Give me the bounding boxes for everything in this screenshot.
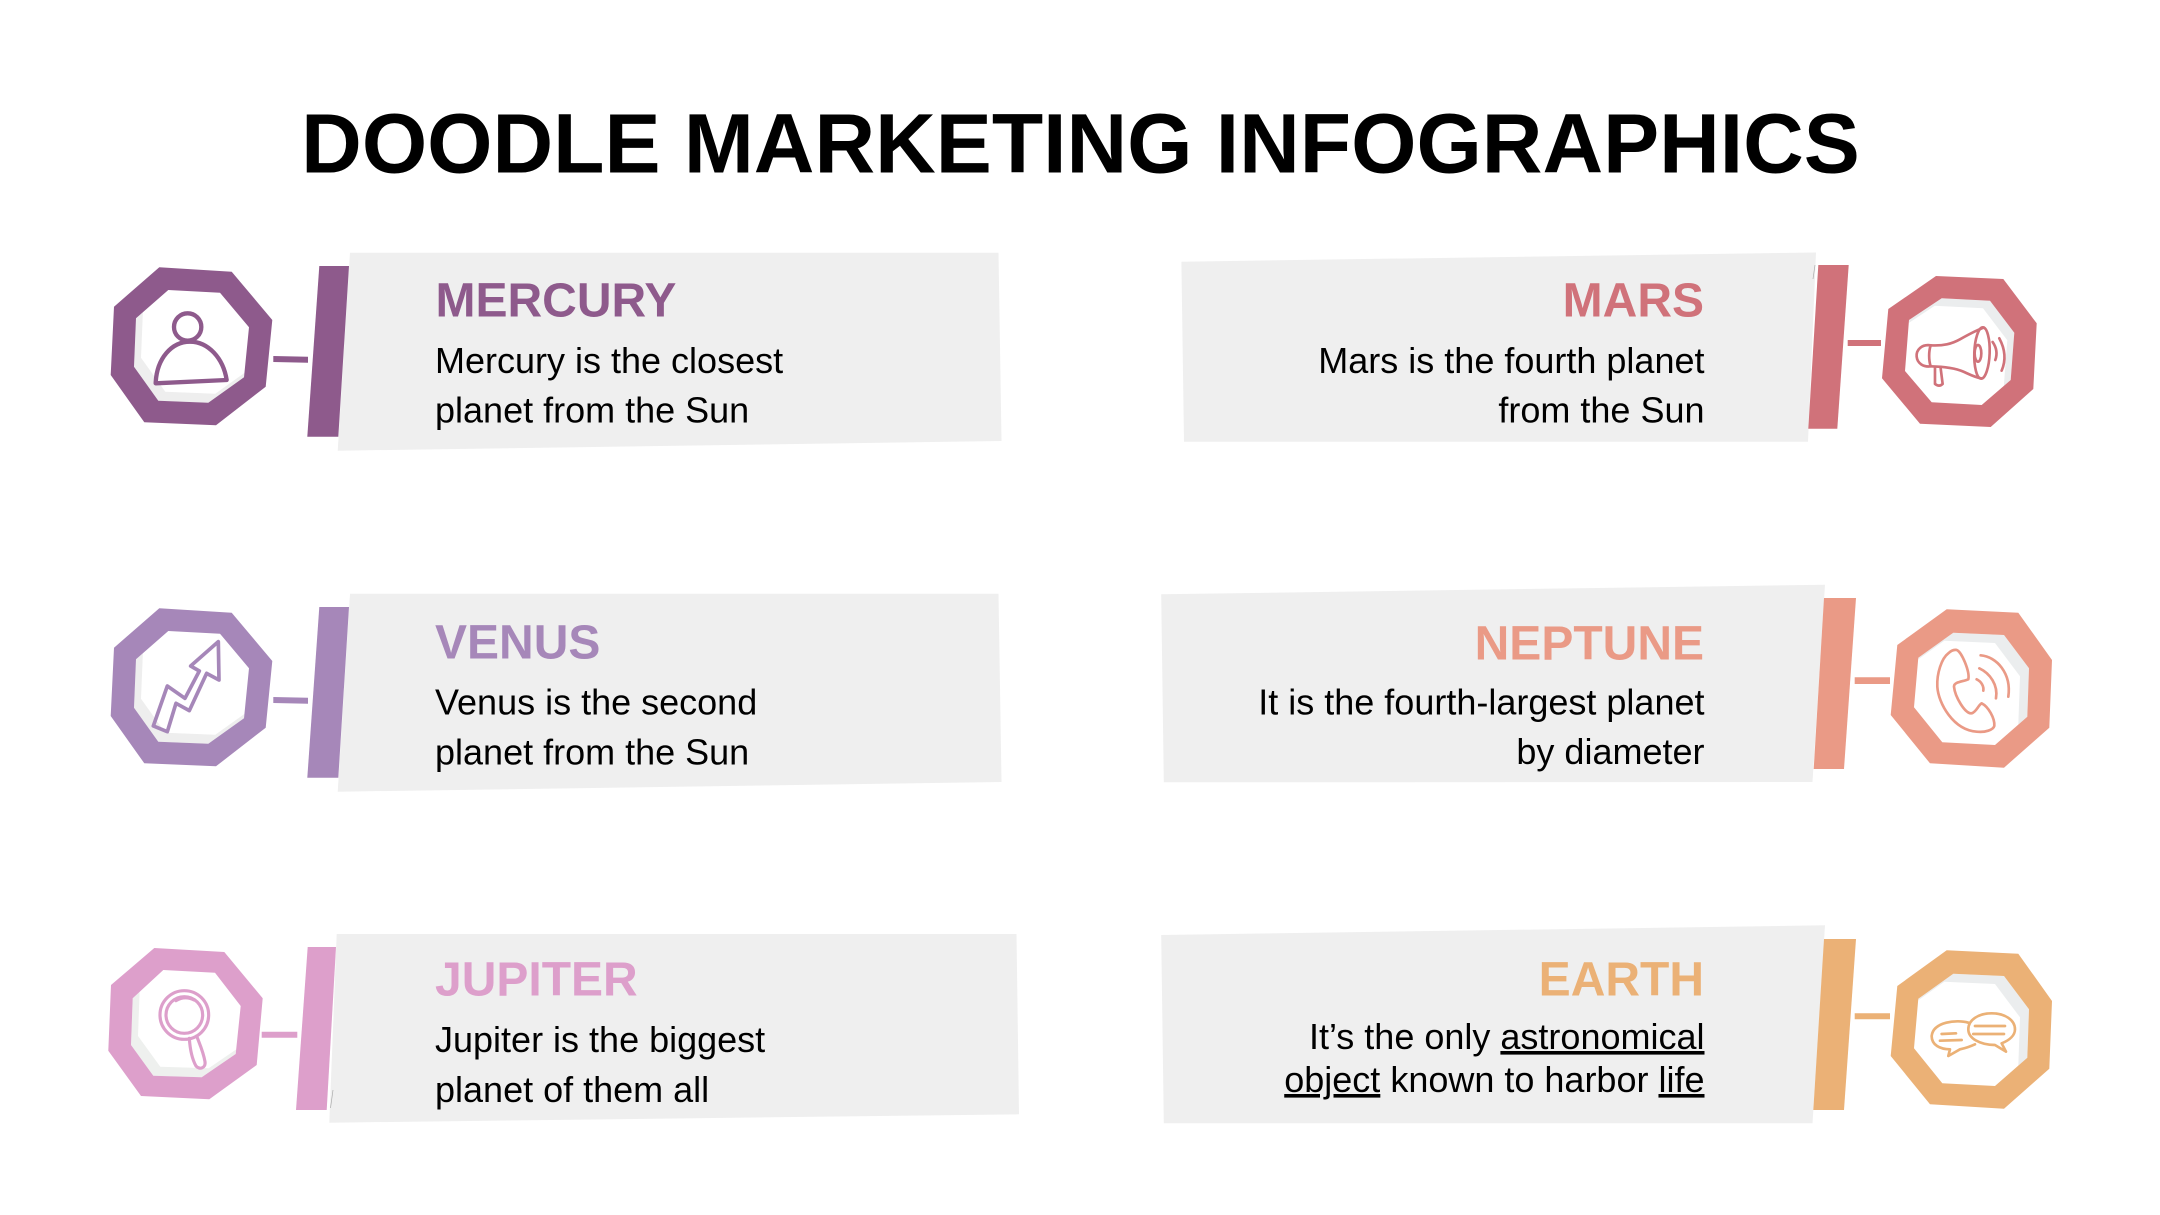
panel: Earth background — [1161, 925, 1825, 1123]
accent bar: Mercury — [307, 266, 349, 437]
icon badge: Mars megaphone — [1882, 276, 2037, 427]
text: Neptune description: It is the fourth-largest planet — [1258, 682, 1704, 722]
text: Jupiter description: Jupiter is the biggest — [435, 1019, 765, 1060]
connector: Mercury — [273, 356, 308, 363]
panel: Mercury background — [338, 253, 1002, 451]
icon badge: Venus growth arrow — [111, 608, 272, 766]
title: DOODLE MARKETING INFOGRAPHICS — [301, 97, 1860, 191]
item: Venus — [111, 594, 1001, 792]
text: Earth description: object known to harbor life — [1284, 1059, 1704, 1100]
icon badge: Neptune phone — [1891, 609, 2052, 768]
panel: Mars background — [1181, 252, 1816, 442]
accent bar: Neptune — [1814, 598, 1856, 769]
item: Mars — [1181, 252, 2037, 442]
connector: Neptune — [1855, 677, 1890, 684]
heading: Jupiter: JUPITER — [435, 954, 638, 1006]
text: Mercury description: Mercury is the closest — [435, 340, 783, 381]
item: Mercury — [111, 253, 1001, 451]
text: Jupiter description: planet of them all — [435, 1069, 709, 1110]
connector: Jupiter — [262, 1032, 297, 1038]
item: Jupiter — [108, 934, 1019, 1123]
text: Neptune description: by diameter — [1516, 731, 1705, 772]
heading: Earth: EARTH — [1539, 954, 1704, 1006]
heading: Mars: MARS — [1563, 274, 1704, 328]
connector: Earth — [1855, 1013, 1890, 1019]
icon badge: Earth chat bubbles — [1891, 950, 2052, 1109]
icon badge: Jupiter magnifier — [108, 948, 263, 1099]
connector: Mars — [1848, 340, 1881, 346]
panel: Venus background — [338, 594, 1002, 792]
panel: Jupiter background — [329, 934, 1019, 1123]
heading: Neptune: NEPTUNE — [1475, 618, 1704, 670]
accent bar: Jupiter — [296, 947, 336, 1110]
panel: Neptune background — [1161, 585, 1825, 782]
text: Earth description: It’s the only astronomical — [1309, 1016, 1704, 1057]
text: Venus description: planet from the Sun — [435, 732, 749, 772]
item: Neptune — [1161, 585, 2052, 782]
icon badge: Mercury user — [111, 267, 272, 425]
accent bar: Earth — [1813, 939, 1856, 1110]
text: Mars description: from the Sun — [1498, 390, 1704, 430]
text: Venus description: Venus is the second — [435, 682, 757, 722]
heading: Mercury: MERCURY — [436, 274, 676, 328]
accent bar: Mars — [1808, 265, 1849, 429]
text: Mars description: Mars is the fourth planet — [1318, 340, 1704, 381]
item: Earth — [1161, 925, 2052, 1123]
heading: Venus: VENUS — [435, 616, 600, 670]
connector: Venus — [273, 697, 308, 704]
text: Mercury description: planet from the Sun — [435, 390, 749, 430]
accent bar: Venus — [307, 607, 349, 778]
